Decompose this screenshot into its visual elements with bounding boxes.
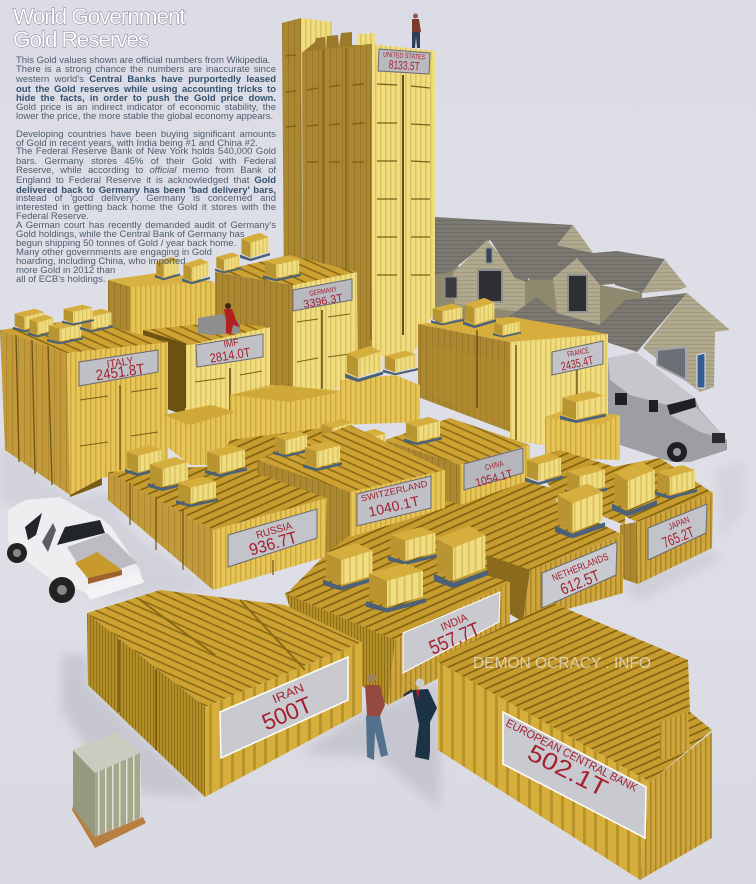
label: United States: UNITED STATES [383, 52, 426, 61]
label: France: 2435.4T [560, 353, 595, 374]
text block: article body: lower the price, the more stable the global economy appears. [16, 111, 273, 122]
title: Gold Reserves [13, 27, 149, 52]
label: Netherlands [542, 542, 617, 608]
gold stack: Italy [0, 305, 168, 497]
label: Germany: 3396.3T [302, 292, 344, 311]
house [435, 217, 730, 392]
gold stacks: central blocks [163, 346, 625, 600]
text block: article body: bars. Germany stores 45% of their Gold with Federal [16, 156, 276, 167]
label: Netherlands: NETHERLANDS [551, 552, 611, 584]
text block: article body: hide the facts, in order to push the Gold price down. [16, 93, 276, 104]
gold stack: back left block [108, 257, 225, 350]
gold stack: United States tower [282, 18, 435, 370]
gold stack: Germany [215, 233, 358, 395]
figures: two men talking [365, 674, 437, 760]
sofa and seated woman in red [198, 303, 240, 335]
label: Switzerland: SWITZERLAND [360, 478, 429, 504]
gold stack: France [418, 298, 608, 445]
gold stack: India [285, 526, 510, 705]
label: Iran: 500T [258, 691, 316, 735]
label: Germany [293, 279, 352, 311]
text block: article body: This Gold values shown are official numbers from Wikipedia. [16, 55, 270, 66]
label: Japan: JAPAN [667, 514, 691, 532]
gold stack: Switzerland [257, 425, 445, 555]
label: France [552, 341, 603, 375]
label: European Central Bank: EUROPEAN CENTRAL BANK [504, 718, 639, 795]
text block: article body: of Gold in recent years, with India being #1 and China #2. [16, 138, 258, 149]
text block: article body: England to Federal Reserve it is acknowledged that Gold [16, 175, 276, 186]
label: Switzerland [357, 476, 431, 526]
text block: article body: A German court has recently demanded audit of Germany's [16, 220, 276, 231]
semi truck [608, 353, 727, 462]
label: Italy [79, 350, 158, 386]
label: Russia [228, 509, 317, 567]
gold stack: Russia [108, 445, 327, 590]
gold stack: Iran [87, 590, 362, 797]
text block: article body: Gold price is an indirect indicator of economic stability, the [16, 102, 276, 113]
floor shadows [0, 440, 745, 810]
text block: article body: interested in getting back home the Gold it stores with the [16, 202, 276, 213]
label: China: 1054.1T [474, 466, 515, 490]
label: China [464, 448, 523, 490]
label: Iran: IRAN [270, 680, 306, 706]
label: Netherlands: 612.5T [558, 567, 603, 599]
label: Japan: 765.2T [660, 524, 697, 552]
label: Germany: GERMANY [309, 286, 338, 298]
pickup truck [7, 497, 145, 603]
label: United States: 8133.5T [388, 57, 421, 74]
gold stack: block in front of France [545, 391, 620, 460]
text block: article body: Gold holdings, while the Central Bank of Germany has [16, 229, 245, 240]
label: European Central Bank [503, 712, 646, 838]
pallet of cash [72, 732, 146, 848]
text block: article body: hoarding, including China, who imported [16, 256, 186, 267]
label: Italy: 2451.8T [95, 361, 146, 384]
text block: article body: instead of 'good delivery'. Germany is concerned and [16, 193, 276, 204]
gold stack: IMF [143, 322, 270, 425]
figure: man on top of United States stack [412, 14, 421, 48]
label: Japan [648, 504, 707, 560]
label: European Central Bank: 502.1T [523, 739, 612, 803]
gold stack: Japan [525, 453, 713, 584]
label: Russia: 936.7T [247, 528, 299, 560]
watermark: DEMON OCRACY . INFO [473, 655, 651, 672]
label: IMF: IMF [223, 337, 240, 351]
label: India: 557.7T [426, 619, 483, 660]
label: China: CHINA [484, 459, 505, 472]
text block: article body: Reserve, while according to official memo from Bank of [16, 165, 276, 176]
text block: article body: The Federal Reserve Bank of New York holds 540,000 Gold [16, 146, 276, 157]
label: India: INDIA [439, 612, 470, 634]
gold stack: Netherlands [440, 484, 623, 622]
label: France: FRANCE [566, 346, 590, 359]
text block: article body: out the Gold reserves while using accounting tricks to [16, 84, 276, 95]
label: Iran [220, 657, 348, 758]
text block: article body: more Gold in 2012 than [16, 265, 115, 276]
gold stack: China [320, 417, 530, 505]
label: India [403, 592, 500, 673]
label: Italy: ITALY [106, 355, 135, 371]
label: United States [378, 49, 430, 74]
text block: article body: delivered back to Germany has been 'bad delivery' bars, [16, 185, 276, 196]
text block: article body: Many other governments are engaging in Gold [16, 247, 212, 258]
text block: article body: western world's Central Banks have purportedly leased [16, 74, 276, 85]
text block: article body: begun shipping 50 tonnes of Gold / year back home. [16, 238, 236, 249]
label: IMF: 2814.0T [209, 345, 251, 366]
title: World Government [13, 4, 186, 29]
label: IMF [196, 334, 263, 367]
text block: article body: Developing countries have been buying significant amounts [16, 129, 276, 140]
text block: article body: all of ECB's holdings. [16, 274, 105, 285]
label: Russia: RUSSIA [255, 520, 294, 542]
label: Switzerland: 1040.1T [367, 492, 421, 520]
title [13, 4, 186, 52]
gold stack: European Central Bank [438, 603, 712, 880]
text block: article body: Federal Reserve. [16, 211, 89, 222]
text block: article body: There is a strong chance the numbers are inaccurate since [16, 64, 276, 75]
